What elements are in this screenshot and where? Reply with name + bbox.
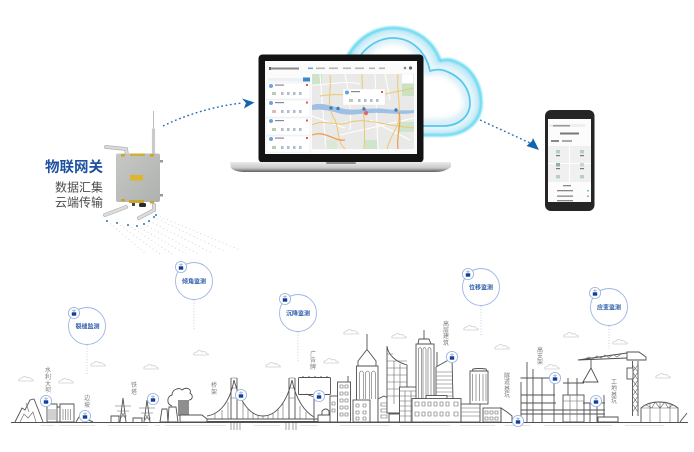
arrow: cloud to phone: [480, 120, 539, 150]
gateway description: 云端传输: [55, 194, 103, 210]
labels: structures: 广: [310, 350, 316, 358]
icon: sensor: [68, 307, 80, 319]
ground line: [11, 422, 688, 424]
laptop: [230, 54, 451, 172]
labels: structures: 告: [310, 356, 316, 364]
labels: structures: 地: [611, 384, 617, 392]
labels: structures: 铁: [131, 381, 137, 389]
labels: structures: 高: [443, 320, 449, 328]
labels: structures: 筑: [443, 339, 449, 347]
labels: structures: 坑: [504, 391, 510, 399]
icon: sensor: [462, 268, 474, 280]
labels: structures: 道: [504, 378, 510, 386]
lower left antenna: [105, 207, 126, 215]
monitor: strain: 应变监测: [597, 304, 621, 312]
labels: structures: 牌: [310, 363, 316, 371]
small clouds: [19, 326, 670, 383]
arrowhead: [526, 138, 539, 150]
monitor: crack: [68, 307, 106, 374]
labels: structures: 支: [537, 352, 543, 360]
monitor: tilt: 倾角监测: [182, 278, 206, 286]
power plant: [160, 388, 207, 422]
monitor: tilt: [175, 261, 212, 330]
labels: structures: 坝: [45, 386, 51, 394]
gateway description: 数据汇集: [55, 180, 103, 194]
labels: structures: 基: [504, 385, 510, 393]
construction scaffold: [520, 362, 618, 422]
power towers: [111, 398, 155, 422]
top antenna: [152, 111, 154, 131]
dashboard map: [312, 74, 414, 149]
icon: IoT gateway: [105, 111, 163, 218]
labels: structures: 利: [45, 373, 51, 381]
labels: structures: 高: [537, 346, 543, 354]
labels: structures: 隧: [504, 372, 510, 380]
screen: monitoring dashboard: [265, 61, 417, 154]
arrow: gateway to platform: [163, 98, 254, 126]
cloud inner haze: [366, 43, 464, 119]
monitor: crack: 裂缝监测: [75, 322, 100, 330]
phone: [545, 110, 594, 211]
cloud: [348, 28, 481, 135]
tower crane: [578, 352, 646, 416]
dashboard header: [269, 66, 412, 70]
labels: structures: 架: [537, 358, 543, 366]
laptop bezel: [258, 54, 424, 162]
monitor: strain: [589, 287, 628, 349]
gateway description: [55, 180, 103, 210]
mountain and dam: [15, 399, 93, 422]
ground reflections: [41, 424, 664, 426]
labels: structures: 基: [611, 391, 617, 399]
city skyline: [11, 330, 688, 430]
downtown buildings: [330, 330, 512, 422]
phone body: [545, 110, 594, 211]
labels: structures: 层: [443, 327, 449, 334]
gateway heading: 物联网关: [45, 158, 103, 176]
billboard: [298, 376, 336, 422]
lower right antenna: [139, 205, 154, 218]
phone screen: [548, 119, 591, 202]
labels: structures: 水: [45, 366, 51, 374]
monitor: displacement: [462, 268, 500, 337]
labels: structures: 建: [443, 332, 449, 340]
icon: sensor: [589, 287, 601, 299]
labels: structures: 大: [45, 380, 51, 388]
dashboard device list: [266, 78, 310, 152]
labels: structures: 坑: [611, 397, 617, 405]
icon: sensor: [279, 293, 291, 305]
suspension bridge: [207, 378, 334, 430]
laptop base: [230, 162, 451, 172]
upper left antenna: [106, 147, 127, 155]
map legend: [402, 74, 413, 83]
labels: structures: 工: [611, 379, 617, 386]
map popup: [343, 89, 385, 105]
arrowhead: [242, 98, 254, 108]
monitor: settlement: 沉降监测: [286, 310, 310, 318]
sensor badges on structures: [40, 351, 602, 427]
labels: structures: 架: [211, 388, 217, 396]
labels: structures: [45, 320, 617, 409]
labels: structures: 边: [84, 394, 90, 402]
icon: sensor: [175, 261, 187, 273]
laptop notch: [326, 162, 356, 164]
monitor: displacement: 位移监测: [469, 284, 493, 292]
labels: structures: 塔: [131, 388, 137, 396]
monitor: settlement: [279, 293, 316, 362]
labels: structures: 桥: [211, 381, 217, 389]
labels: structures: 坡: [84, 401, 90, 409]
enclosure: [116, 154, 160, 202]
signal fan: [106, 214, 240, 254]
dome hall: [641, 402, 687, 422]
